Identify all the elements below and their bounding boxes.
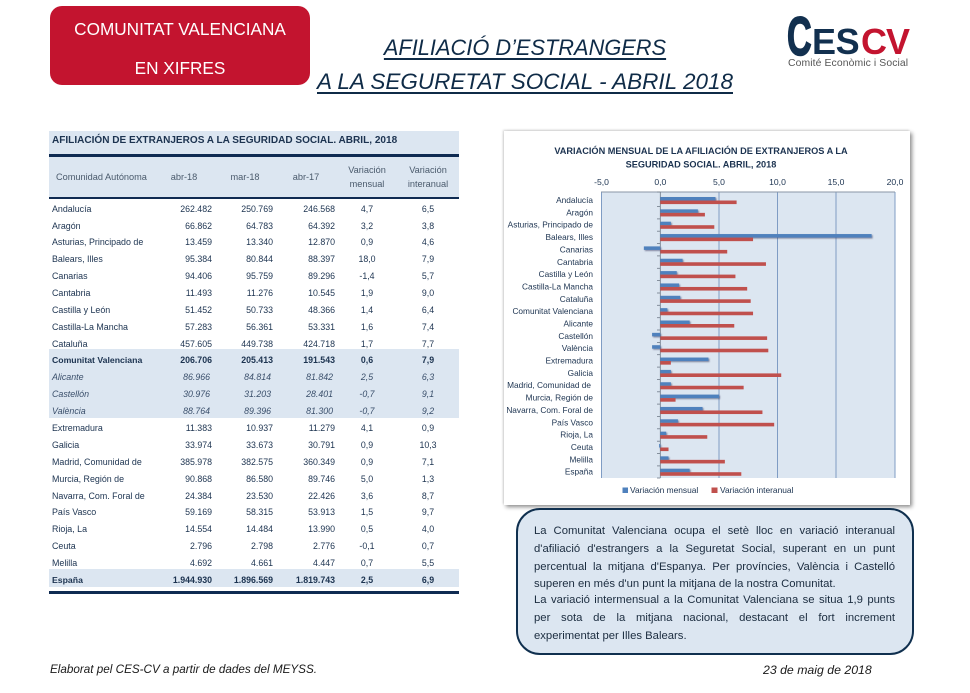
row: Extremadura: 4,1 [361,422,373,432]
row: Castellón: -0,7 [359,388,375,398]
row: Comunitat Valenciana: 7,9 [422,354,434,364]
callout: commentary text: percentual la mitjana d'Espanya. Per províncies, València i Castelló [534,561,895,573]
row: Extremadura [52,422,434,432]
row: Cantabria: 11.493 [186,288,212,298]
row: País Vasco [52,506,434,516]
row: Cataluña [52,338,434,348]
row: Galicia: 33.974 [185,440,212,450]
row: Castilla-La Mancha: Castilla-La Mancha [52,322,128,332]
row: España: 2,5 [361,574,373,584]
row: Andalucía: Andalucía [52,204,91,214]
row: País Vasco: 59.169 [185,506,212,516]
bars: variación mensual [644,197,872,472]
row: València: 89.396 [244,406,271,416]
row: Cantabria: 11.276 [247,288,273,298]
title line 1: AFILIACIÓ D’ESTRANGERS [384,35,666,60]
row: Rioja: 13.990 [308,524,335,534]
category labels [506,195,593,477]
row: País Vasco: País Vasco [52,506,96,516]
row: Aragón [52,220,434,231]
row: Melilla [52,558,434,568]
row: Asturias: 13.340 [246,236,273,246]
row: Alicante: 81.842 [306,372,333,382]
row: Asturias: Asturias, Principado de [52,236,143,246]
category labels: Balears, Illes [546,232,593,242]
category labels: Navarra, Com. Foral de [506,405,593,415]
row: Comunitat Valenciana: 191.543 [303,354,335,364]
category labels: Andalucía [556,195,593,205]
row: Ceuta: 2.796 [190,540,212,550]
row: Castilla y León: 51.452 [185,304,212,314]
row: Rioja: 14.484 [246,524,273,534]
row: Castellón: 31.203 [244,388,271,398]
row: Aragón: 3,2 [361,220,373,230]
row: Balears: 88.397 [308,254,335,264]
table header: mar-18 [230,172,260,182]
category labels: Melilla [569,454,593,464]
row: Asturias: 0,9 [361,236,373,246]
row: Murcia: 89.746 [308,474,335,484]
row: Castilla-La Mancha: 7,4 [422,322,434,332]
callout: commentary text: La Comunitat Valenciana ocupa el setè lloc en variació interanual [534,525,895,537]
table title: AFILIACIÓN DE EXTRANJEROS A LA SEGURIDAD SOCIAL. ABRIL, 2018 [52,135,397,146]
row: Extremadura: 0,9 [422,422,434,432]
row: Canarias [52,270,434,280]
legend: Variación mensual [630,485,698,495]
row: Castilla-La Mancha: 57.283 [185,322,212,332]
row: Cantabria: 9,0 [422,288,434,298]
row: España: 1.896.569 [234,574,273,584]
row: Rioja: 14.554 [185,524,212,534]
row: Canarias: 95.759 [246,270,273,280]
row: València: -0,7 [359,406,375,416]
row: Navarra [52,490,434,500]
row: Melilla: 5,5 [422,558,434,568]
bars: variación interanual [660,200,781,476]
row: Extremadura: 11.383 [186,422,212,432]
callout: commentary text: La variació intermensual a la Comunitat Valenciana se situa 1,9 punts [534,594,895,606]
row: Castilla-La Mancha [52,322,434,332]
axis labels [594,177,904,187]
logo: CES-CV: Comité Econòmic i Social [788,58,908,68]
row: España: 1.944.930 [173,574,212,584]
row: Canarias: Canarias [52,270,88,280]
callout: commentary text [516,508,914,655]
row: Castilla-La Mancha: 1,6 [361,322,373,332]
category labels: València [562,343,593,353]
table header: interanual [408,179,448,189]
row: España: 1.819.743 [296,574,335,584]
row: Ceuta: -0,1 [359,540,375,550]
category labels: Aragón [566,207,593,217]
row: Ceuta: 2.776 [313,540,335,550]
category labels: Rioja, La [560,430,593,440]
row: Alicante: 86.966 [183,372,210,382]
row: España: 6,9 [422,574,434,584]
axis labels: 0,0 [654,177,666,187]
row: Asturias: 12.870 [308,236,335,246]
chart title: VARIACIÓN MENSUAL DE LA AFILIACIÓN DE EXTRANJEROS A LA [554,145,848,156]
row: País Vasco: 58.315 [246,506,273,516]
logo: CES-CV: ES [812,20,859,62]
row: Castilla y León: 1,4 [361,304,373,314]
category labels: Murcia, Región de [526,393,593,403]
logo: CES-CV [787,5,910,68]
row: Ceuta: 0,7 [422,540,434,550]
row: Extremadura: 10.937 [246,422,273,432]
table header: Variación [409,165,447,175]
row: Alicante: Alicante [52,372,84,382]
row: Balears: 95.384 [185,254,212,264]
row: Alicante: 6,3 [422,372,434,382]
row: Aragón: 64.783 [246,220,273,230]
row: Castilla-La Mancha: 56.361 [246,322,273,332]
axis labels: 5,0 [713,177,725,187]
legend: Variación interanual [720,485,794,495]
row: Galicia: Galicia [52,440,79,450]
row: Castilla y León: 48.366 [308,304,335,314]
row: Cantabria: Cantabria [52,288,90,298]
row: València: 81.300 [306,406,333,416]
row: Castilla y León: Castilla y León [52,304,110,314]
category labels: Castilla-La Mancha [522,281,593,291]
axis labels: 10,0 [769,177,786,187]
row: Castilla y León [52,304,434,315]
row: Galicia: 30.791 [308,440,335,450]
row: Ceuta [52,540,434,550]
category labels: Cantabria [557,257,593,267]
row: Rioja: 4,0 [422,524,434,534]
badge: Comunitat Valenciana en xifres: EN XIFRES [135,58,225,78]
row: Andalucía: 262.482 [180,204,212,214]
category labels: País Vasco [552,417,593,427]
row: Ceuta: Ceuta [52,540,76,550]
row: Castellón: 28.401 [306,388,333,398]
row: Canarias: 89.296 [308,270,335,280]
footer: source: Elaborat pel CES-CV a partir de dades del MEYSS. [50,663,317,676]
row: Balears: 80.844 [246,254,273,264]
category labels: Cataluña [560,294,593,304]
row: Castellón: 30.976 [183,388,210,398]
row: Asturias: 13.459 [185,236,212,246]
row: Asturias: 4,6 [422,236,434,246]
row: Comunitat Valenciana: 205.413 [241,354,273,364]
callout: commentary text: d'afiliació d'estrangers a la Seguretat Social, superant en un punt [534,543,895,555]
category labels: Alicante [563,318,593,328]
row: Madrid: 382.575 [241,456,273,466]
legend [622,485,794,495]
row: Rioja: Rioja, La [52,524,87,534]
table header: abr-18 [171,172,197,182]
row: España [52,574,434,584]
row: Castellón: Castellón [52,388,89,398]
badge: Comunitat Valenciana en xifres [50,6,310,85]
table header: abr-17 [293,172,319,182]
table header [56,165,448,189]
row: Madrid: Madrid, Comunidad de [52,456,142,466]
row: Madrid: 7,1 [422,456,434,466]
row: Comunitat Valenciana [52,354,434,364]
row: Extremadura: Extremadura [52,422,103,432]
row: Navarra: 22.426 [308,490,335,500]
row: Cantabria: 10.545 [308,288,335,298]
row: Aragón: Aragón [52,220,81,230]
row: Comunitat Valenciana: 0,6 [361,354,373,364]
row: Canarias: -1,4 [359,270,375,280]
row: Galicia: 33.673 [246,440,273,450]
row: València: 88.764 [183,406,210,416]
plot area [602,192,895,478]
row: Galicia: 0,9 [361,440,373,450]
row: País Vasco: 9,7 [422,506,434,516]
category labels: España [565,467,593,477]
category labels: Castellón [558,331,593,341]
badge: Comunitat Valenciana en xifres: COMUNITAT VALENCIANA [74,19,286,39]
row: Andalucía [52,204,434,214]
row: Cataluña: Cataluña [52,338,88,348]
row: Alicante: 2,5 [361,372,373,382]
category labels: Extremadura [546,356,593,366]
row: Andalucía: 250.769 [241,204,273,214]
row: País Vasco: 53.913 [308,506,335,516]
row: España: España [52,574,83,584]
row: Rioja: 0,5 [361,524,373,534]
panel: bar chart [504,131,910,505]
row: Murcia [52,474,434,484]
row: Comunitat Valenciana: Comunitat Valenciana [52,354,142,364]
row: Castilla y León: 6,4 [422,304,434,314]
logo: CES-CV: CV [861,20,909,62]
logo: CES-CV: C [787,5,812,67]
row: Extremadura: 11.279 [309,422,335,432]
table header: Variación [348,165,386,175]
row: Aragón: 66.862 [185,220,212,230]
row: Castilla-La Mancha: 53.331 [308,322,335,332]
row: Melilla: Melilla [52,558,77,568]
row: Balears: 7,9 [422,254,434,264]
row: Murcia: Murcia, Región de [52,474,124,484]
row: Navarra: 24.384 [185,490,212,500]
zero axis with ticks [657,192,660,478]
category labels: Comunitat Valenciana [512,306,593,316]
row: Murcia: 5,0 [361,474,373,484]
row: Navarra: 8,7 [422,490,434,500]
row: Melilla: 4.447 [313,558,335,568]
callout: commentary text: superen en més d'un punt la mitjana de la nostra Comunitat. [534,578,836,590]
row: Murcia: 86.580 [246,474,273,484]
row: Navarra: 3,6 [361,490,373,500]
category labels: Canarias [560,244,593,254]
row: Aragón: 64.392 [308,220,335,230]
callout: commentary text: experimentat per Illes Balears. [534,630,687,642]
row: Cataluña: 457.605 [180,338,212,348]
row: Melilla: 0,7 [361,558,373,568]
row: Alicante [52,372,434,382]
row: Castellón: 9,1 [422,388,434,398]
row: Balears: 18,0 [358,254,376,264]
table: afiliación de extranjeros [49,131,459,594]
chart title [554,145,848,170]
row: València [52,406,434,416]
row: Melilla: 4.692 [190,558,212,568]
row: Cataluña: 424.718 [303,338,335,348]
row: Andalucía: 4,7 [361,204,373,214]
row: Murcia: 1,3 [422,474,434,484]
callout: commentary text: per sota de la mitjana nacional, destacant el fort increment [534,612,895,624]
row: Comunitat Valenciana: 206.706 [180,354,212,364]
row: Castellón [52,388,434,398]
row: Galicia: 10,3 [419,440,437,450]
row: Andalucía: 246.568 [303,204,335,214]
row: Balears: Balears, Illes [52,254,103,264]
category labels: Castilla y León [539,269,593,279]
category labels: Galicia [568,368,593,378]
table header: mensual [350,179,384,189]
row: Murcia: 90.868 [185,474,212,484]
row: Madrid: 360.349 [303,456,335,466]
row: Navarra: Navarra, Com. Foral de [52,490,145,500]
row: Galicia [52,440,437,450]
row: Cantabria [52,288,434,298]
row: Asturias [52,236,434,247]
row: Aragón: 3,8 [422,220,434,230]
row: Madrid: 0,9 [361,456,373,466]
category labels: Madrid, Comunidad de [507,380,591,390]
row: Castilla y León: 50.733 [246,304,273,314]
axis labels: -5,0 [594,177,609,187]
row: Cataluña: 1,7 [361,338,373,348]
row: Navarra: 23.530 [246,490,273,500]
row: Cataluña: 7,7 [422,338,434,348]
table header: Comunidad Autónoma [56,172,147,182]
row: Madrid [52,456,434,466]
row: Madrid: 385.978 [180,456,212,466]
row: Cantabria: 1,9 [361,288,373,298]
row: Andalucía: 6,5 [422,204,434,214]
category labels: Asturias, Principado de [508,220,593,230]
row: València: València [52,406,86,416]
category labels: Ceuta [571,442,593,452]
row: Melilla: 4.661 [251,558,273,568]
axis labels: 20,0 [887,177,904,187]
row: Canarias: 5,7 [422,270,434,280]
row: Rioja [52,524,434,534]
row: Cataluña: 449.738 [241,338,273,348]
chart title: SEGURIDAD SOCIAL. ABRIL, 2018 [626,160,776,170]
title line 2: A LA SEGURETAT SOCIAL - ABRIL 2018 [317,69,733,94]
row: Canarias: 94.406 [185,270,212,280]
row: Ceuta: 2.798 [251,540,273,550]
footer: date: 23 de maig de 2018 [763,663,872,677]
axis labels: 15,0 [828,177,845,187]
row: País Vasco: 1,5 [361,506,373,516]
row: Alicante: 84.814 [244,372,271,382]
row: València: 9,2 [422,406,434,416]
row: Balears [52,254,434,264]
